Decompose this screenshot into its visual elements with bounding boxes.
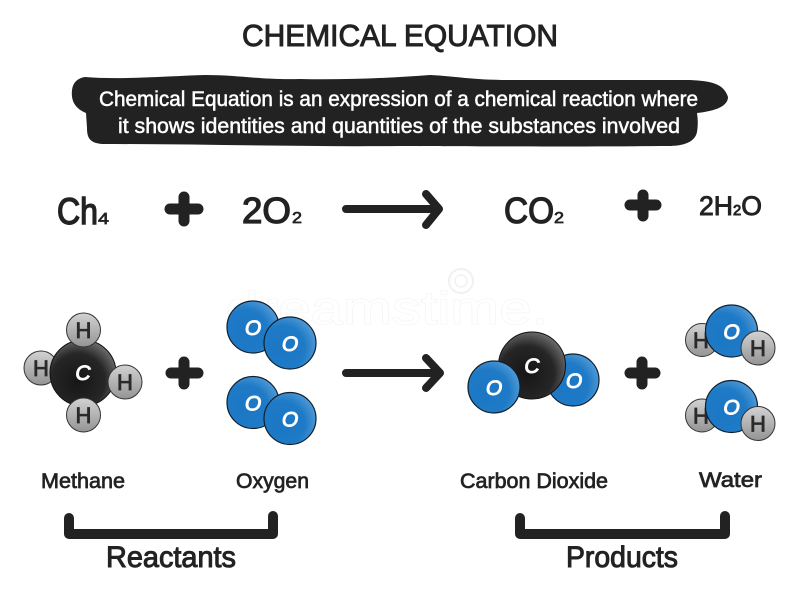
- molecule: carbon dioxide: O: [486, 377, 502, 400]
- equation: oxygen formula: 2O: [242, 190, 291, 231]
- label: water: Water: [699, 469, 762, 492]
- molecule: water 2: [686, 380, 775, 440]
- plus 2: [630, 362, 655, 384]
- bracket: products: [520, 516, 725, 534]
- watermark: [226, 269, 548, 334]
- plus 1: [171, 362, 198, 384]
- equation plus 1: [170, 197, 198, 221]
- molecule: carbon dioxide: C: [524, 355, 540, 378]
- molecule: oxygen 2: [227, 376, 316, 444]
- molecule: methane: H: [76, 403, 91, 428]
- molecule: carbon dioxide: O: [566, 370, 582, 393]
- molecule: oxygen 1: [227, 301, 316, 369]
- equation: methane formula: Ch: [57, 191, 98, 232]
- equation: carbon dioxide formula: 2: [554, 210, 564, 227]
- molecule: carbon dioxide: [468, 332, 599, 413]
- definition banner: [72, 75, 728, 146]
- label: methane: Methane: [41, 470, 125, 493]
- title: CHEMICAL EQUATION: [242, 18, 558, 53]
- heading: products: Products: [566, 541, 678, 574]
- banner line 2: it shows identities and quantities of the substances involved: [118, 115, 680, 138]
- equation arrow: [346, 194, 439, 225]
- equation: carbon dioxide formula: CO: [504, 190, 554, 231]
- equation plus 2: [630, 195, 656, 216]
- equation: oxygen formula: 2: [292, 210, 302, 227]
- watermark: dreamstime.: [226, 282, 548, 334]
- molecule: water 1: [686, 305, 775, 365]
- bracket: reactants: [69, 516, 273, 534]
- molecule: methane: [24, 313, 142, 432]
- reaction arrow: [346, 358, 440, 388]
- label: carbon dioxide: Carbon Dioxide: [460, 470, 608, 493]
- equation: methane formula: 4: [98, 211, 109, 228]
- equation: water formula: 2H2O: [699, 191, 762, 221]
- heading: reactants: Reactants: [106, 541, 236, 574]
- banner line 1: Chemical Equation is an expression of a chemical reaction where: [99, 88, 698, 111]
- molecule: methane: H: [117, 370, 133, 395]
- molecule: methane: C: [75, 362, 91, 385]
- label: oxygen: Oxygen: [236, 470, 309, 493]
- molecule: methane: H: [76, 318, 91, 343]
- molecule: methane: H: [33, 356, 49, 381]
